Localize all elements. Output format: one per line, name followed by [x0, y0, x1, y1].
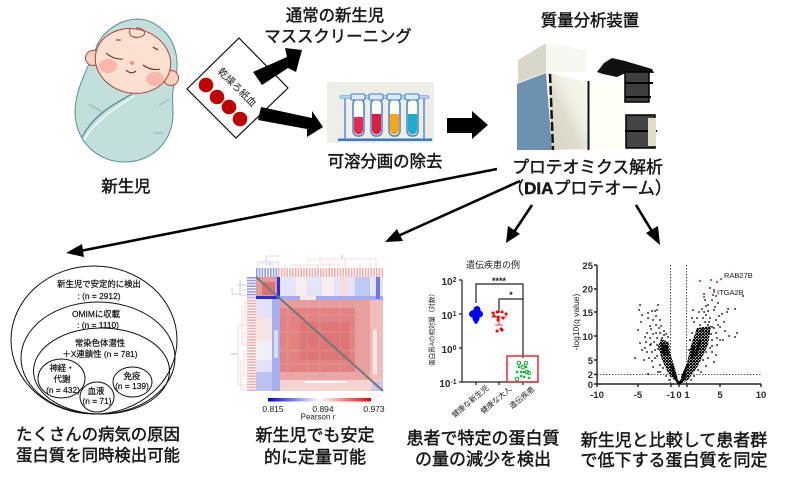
chart: nested ellipses of detected proteins: 血液: [88, 386, 105, 396]
chart: nested ellipses of detected proteins: (n = 71): [82, 396, 112, 406]
arrow: to dot plot: [506, 205, 532, 243]
chart: dot plot of genetic disease example: 遺伝疾患の例: [466, 259, 520, 270]
heading: newborn mass screening: マススクリーニング: [264, 28, 412, 46]
chart: nested ellipses of detected proteins: ＋X連鎖性 (n = 781): [62, 349, 138, 359]
chart: volcano plot: 0: [676, 390, 682, 401]
caption: simultaneous detection: 蛋白質を同時検出可能: [16, 447, 180, 465]
chart: dot plot of genetic disease example: 10: [441, 345, 453, 356]
caption: detect decreased protein: [406, 429, 560, 469]
arrow: to mass spectrometer: [447, 111, 488, 139]
chart: dot plot of genetic disease example: 健康な大人: [478, 384, 514, 416]
chart: nested ellipses of detected proteins: [11, 266, 177, 414]
chart: volcano plot: 5: [717, 390, 723, 401]
chart: nested ellipses of detected proteins: 新生児で安定的に検出: [57, 279, 141, 289]
caption: simultaneous detection: たくさんの病気の原因: [16, 426, 180, 444]
chart: volcano plot: 2: [588, 370, 593, 381]
heading: mass spectrometer: 質量分析装置: [541, 12, 639, 30]
chart: dot plot of genetic disease example: 遺伝疾患: [507, 384, 537, 411]
chart: dot plot of genetic disease example: 10: [441, 277, 453, 288]
caption: stable quantification: [256, 426, 374, 467]
chart: Pearson correlation heatmap: [230, 255, 385, 422]
chart: volcano plot: 0: [588, 380, 593, 391]
chart: Pearson correlation heatmap: 0.973: [363, 404, 385, 414]
chart: nested ellipses of detected proteins: : (n = 2912): [77, 291, 121, 301]
chart: nested ellipses of detected proteins: 代謝: [54, 374, 71, 384]
chart: dot plot of genetic disease example: 健康な新生児: [449, 383, 491, 419]
chart: nested ellipses of detected proteins: : (n = 1110): [77, 320, 119, 330]
icon: mass spectrometer: [517, 43, 657, 150]
label: newborn: 新生児: [101, 178, 151, 196]
chart: nested ellipses of detected proteins: (n = 139): [115, 381, 149, 391]
caption: identify decreased proteins: [580, 431, 768, 470]
chart: nested ellipses of detected proteins: 常染色体潜性: [75, 338, 125, 348]
chart: volcano plot: 10: [582, 332, 593, 343]
chart: volcano plot: 10: [756, 390, 766, 401]
chart: dot plot of genetic disease example: 1: [453, 311, 457, 318]
icon: swaddled newborn: [75, 19, 178, 162]
matrix blocks: [256, 277, 383, 391]
chart: nested ellipses of detected proteins: OMIMに収載: [72, 309, 121, 319]
arrow: to heatmap: [385, 181, 520, 242]
caption: detect decreased protein: の量の減少を検出: [415, 450, 551, 469]
arrow: to volcano plot: [636, 205, 660, 245]
healthy newborn dots: [469, 306, 483, 324]
chart: dot plot of genetic disease example: 蛋白質Aの相対量（対数）: [427, 290, 436, 366]
chart: dot plot of genetic disease example: 10: [441, 311, 453, 322]
chart: dot plot of genetic disease example: 2: [453, 277, 457, 284]
chart: Pearson correlation heatmap: Pearson r: [301, 412, 336, 422]
chart: volcano plot: RAB27B: [724, 271, 753, 280]
colour scale: [268, 398, 371, 402]
heading: proteomics analysis: （DIAプロテオーム）: [507, 179, 672, 198]
chart: volcano plot: -1: [667, 390, 676, 401]
chart: nested ellipses of detected proteins: (n = 432): [46, 385, 80, 395]
caption: stable quantification: 新生児でも安定: [256, 426, 374, 445]
label: removal of soluble fraction: 可溶分画の除去: [328, 153, 442, 171]
heading: newborn mass screening: [264, 7, 412, 46]
caption: identify decreased proteins: で低下する蛋白質を同定: [580, 451, 768, 470]
chart: volcano plot: -10: [590, 390, 604, 401]
texture stripes: [280, 300, 370, 380]
chart: volcano plot: 1: [684, 390, 690, 401]
chart: Pearson correlation heatmap: 0.894: [312, 404, 334, 414]
heading: proteomics analysis: [507, 158, 672, 198]
heading: proteomics analysis: プロテオミクス解析: [512, 158, 663, 177]
chart: volcano plot: 5: [588, 356, 594, 367]
chart: dot plot of genetic disease example: [427, 259, 538, 419]
caption: simultaneous detection: [16, 426, 180, 465]
icon: dried blood spot card: [187, 38, 288, 138]
chart: volcano plot: [571, 261, 766, 401]
caption: identify decreased proteins: 新生児と比較して患者群: [581, 431, 767, 450]
chart: volcano plot: ITGA2B: [717, 288, 744, 297]
chart: dot plot of genetic disease example: -1: [450, 379, 457, 386]
arrow: to newborn mass screening: [253, 48, 302, 85]
chart: dot plot of genetic disease example: *: [509, 290, 513, 300]
caption: stable quantification: 的に定量可能: [264, 448, 366, 467]
chart: volcano plot: -5: [634, 390, 643, 401]
heading: newborn mass screening: 通常の新生児: [286, 7, 384, 25]
icon: test tubes: [327, 82, 434, 143]
icon: dried blood spot card: 乾燥ろ紙血: [215, 65, 259, 109]
chart: dot plot of genetic disease example: 0: [453, 345, 457, 352]
chart: nested ellipses of detected proteins: 神経・: [49, 363, 75, 373]
arrow: to nested ellipses: [66, 169, 497, 257]
chart: dot plot of genetic disease example: 10: [439, 379, 450, 390]
chart: volcano plot: -log10(q value): [571, 293, 581, 350]
chart: Pearson correlation heatmap: 0.815: [262, 404, 284, 414]
chart: volcano plot: 20: [582, 284, 593, 296]
chart: volcano plot: 15: [582, 308, 594, 319]
caption: detect decreased protein: 患者で特定の蛋白質: [406, 429, 560, 448]
chart: volcano plot: 25: [582, 261, 594, 272]
chart: nested ellipses of detected proteins: 免疫: [124, 371, 141, 381]
arrow: to soluble fraction removal: [258, 107, 323, 137]
dendrograms: [230, 255, 376, 390]
chart: dot plot of genetic disease example: ****: [492, 276, 506, 286]
